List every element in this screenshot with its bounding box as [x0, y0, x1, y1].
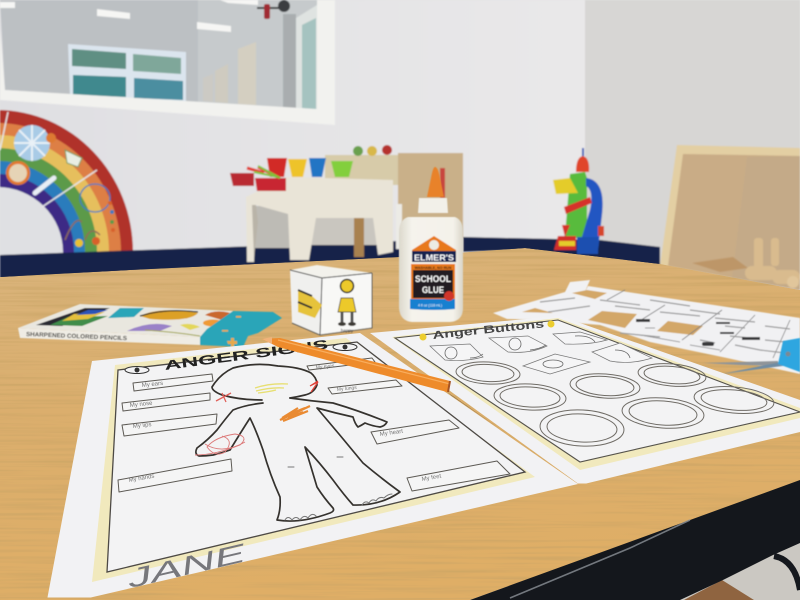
left wall — [0, 0, 586, 290]
label boxes: My heart — [379, 429, 404, 438]
title: Anger Buttons: Anger Buttons — [432, 318, 545, 342]
nozzle — [427, 167, 444, 197]
leaf card — [65, 150, 82, 167]
floor below table — [470, 470, 800, 600]
box label text: SHARPENED COLORED PENCILS — [26, 332, 127, 342]
wood shelf behind table — [325, 145, 463, 249]
cut-out holes — [522, 290, 703, 335]
wooden toy mallets — [692, 238, 800, 288]
label boxes: My ears — [142, 381, 163, 389]
flower illustration — [127, 324, 200, 336]
teal flap — [200, 311, 282, 347]
box of colored pencils — [18, 304, 282, 347]
label boxes: My lungs — [337, 385, 358, 393]
black label panel: WASHABLE, NO RUN — [415, 266, 452, 270]
blue label band: 4 fl oz (118 mL) — [418, 304, 442, 308]
chair leg — [774, 556, 800, 590]
shadows under white table — [252, 206, 378, 257]
wooden cubby shelf — [660, 145, 800, 290]
black label panel — [411, 264, 455, 299]
small teal badge — [108, 308, 144, 318]
wire ring — [80, 184, 110, 212]
wooden table top — [0, 245, 800, 600]
shadow between worksheets — [447, 392, 500, 429]
blue label band — [410, 291, 455, 310]
body outline — [196, 364, 400, 521]
navy baseboard right — [463, 237, 660, 266]
pencil tips strip — [36, 308, 110, 326]
cream border — [92, 338, 535, 582]
box top — [18, 304, 233, 337]
game cube: happy — [341, 328, 354, 333]
observation window interior — [0, 0, 317, 110]
flap crosses — [222, 316, 241, 347]
buckets and bins — [230, 158, 353, 191]
label boxes: My nose — [130, 401, 153, 409]
white activity table — [246, 177, 393, 262]
label boxes: My lips — [133, 422, 152, 430]
black frame — [107, 342, 525, 572]
glue bottle — [399, 167, 463, 322]
glass door — [283, 5, 317, 110]
worksheet: Anger Buttons — [370, 316, 800, 485]
ceiling fixture — [257, 0, 290, 19]
label boxes — [118, 358, 510, 492]
head — [212, 364, 317, 400]
black frame — [395, 320, 800, 462]
interior doors — [203, 42, 256, 105]
torso arms and legs — [196, 398, 400, 521]
cap — [418, 198, 448, 213]
toes and knees — [285, 457, 392, 520]
grid lines — [607, 290, 790, 358]
printed text lines — [540, 298, 790, 353]
window frame — [0, 0, 335, 125]
title: Anger Buttons — [420, 318, 554, 342]
round maze — [6, 161, 30, 185]
scissors — [703, 338, 800, 374]
navy baseboard left — [0, 241, 400, 280]
black label panel: SCHOOL — [415, 274, 451, 284]
wood grain — [0, 245, 800, 600]
title: Anger Signs — [125, 336, 357, 374]
empty button circles — [455, 360, 775, 448]
small dark illustrations — [636, 319, 760, 346]
label logo: ELMER'S — [414, 252, 454, 262]
mirrored outdoor window — [68, 44, 186, 101]
label boxes: My feet — [421, 474, 442, 483]
title: Anger Signs: ANGER SIGNS — [163, 336, 330, 373]
box side — [18, 328, 200, 345]
crayon scribbles — [195, 381, 318, 455]
body — [399, 217, 463, 322]
cream border — [392, 318, 800, 470]
sketch marks on buttons — [445, 336, 630, 368]
white divider lines — [0, 112, 97, 207]
right wall — [585, 0, 800, 300]
black label panel: GLUE — [422, 285, 444, 295]
orange pencil — [262, 337, 450, 392]
beads — [92, 201, 115, 245]
game cube — [290, 265, 372, 335]
label boxes: My eyes — [316, 363, 335, 371]
background room — [0, 0, 800, 290]
worksheet: Anger Signs — [47, 333, 578, 600]
cardboard box on floor — [684, 580, 754, 600]
bead slider — [35, 178, 54, 193]
cut-out button pictures — [430, 332, 652, 374]
cut-out worksheet — [493, 280, 800, 374]
label logo — [412, 236, 456, 262]
black table edge — [470, 480, 800, 600]
label boxes: My hands — [128, 474, 155, 484]
ceiling lights — [0, 0, 258, 32]
signature: JANE: JANE — [123, 537, 249, 594]
side face figure — [298, 290, 322, 318]
rainbow activity wall panel — [0, 109, 134, 254]
butterfly illustration — [140, 310, 230, 326]
happy girl figure — [338, 280, 356, 326]
toy tower — [553, 148, 604, 254]
spinner wheel — [14, 125, 56, 161]
